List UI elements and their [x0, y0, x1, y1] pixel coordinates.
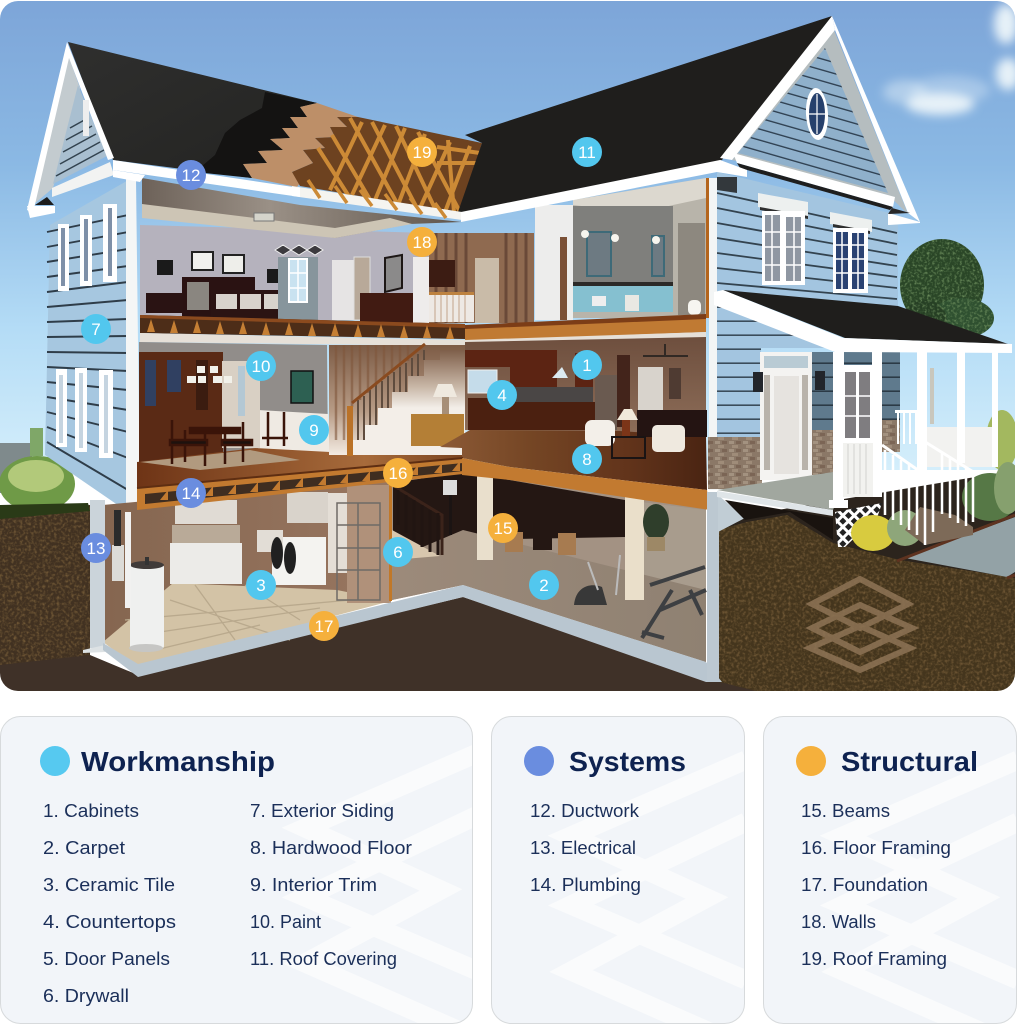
armchairs and lamp — [585, 409, 685, 458]
left eave lower section — [113, 170, 145, 182]
ceiling line main floor — [140, 332, 706, 346]
porch fascia — [714, 290, 1012, 353]
systems list — [530, 801, 641, 895]
workmanship list column one — [43, 801, 176, 1006]
marker 15 — [488, 513, 518, 543]
porch dark underside — [725, 500, 833, 540]
bedroom ceiling — [142, 178, 462, 238]
tree behind porch — [900, 239, 994, 424]
systems swatch — [524, 746, 554, 776]
lounge chairs — [505, 532, 576, 555]
left pier — [83, 500, 105, 653]
workmanship list column two: 11. Roof Covering — [250, 949, 397, 969]
front door — [760, 352, 812, 480]
structural list: 18. Walls — [801, 912, 876, 932]
stair handrail — [352, 344, 425, 403]
floor lamp — [443, 480, 457, 535]
marker 6: 6 — [393, 543, 403, 562]
structural list: 19. Roof Framing — [801, 949, 947, 969]
marker 19 — [407, 137, 437, 167]
marker 3: 3 — [256, 576, 266, 595]
upstairs white wall — [535, 205, 573, 320]
dining curtain and window — [222, 361, 260, 448]
left soil — [0, 505, 90, 668]
systems list: 14. Plumbing — [530, 875, 641, 895]
marker 17 — [309, 611, 339, 641]
marker 18: 18 — [413, 233, 431, 252]
round attic window — [805, 87, 829, 141]
panel: structural — [764, 716, 1017, 1024]
kitchen and living floor — [440, 430, 707, 490]
porch wall siding left — [717, 348, 761, 438]
porch roof — [723, 290, 1008, 344]
wall trim between interior and right wing — [706, 178, 717, 490]
stair balusters — [358, 350, 424, 440]
crown molding — [142, 204, 412, 238]
left gable soffit — [33, 52, 80, 205]
vertical pipe — [125, 512, 131, 608]
main right wall siding — [717, 172, 898, 308]
workmanship list column one: 3. Ceramic Tile — [43, 875, 175, 895]
porch columns — [829, 352, 998, 508]
bed — [187, 282, 278, 319]
marker 14 — [176, 478, 206, 508]
left wing siding lines — [47, 215, 128, 490]
structural list: 16. Floor Framing — [801, 838, 951, 858]
right eave — [461, 160, 745, 222]
kitchen — [465, 337, 706, 440]
dining table and chairs — [170, 412, 288, 466]
wire shelving — [337, 503, 380, 600]
exercise bike — [574, 555, 620, 605]
right foundation wall — [707, 492, 745, 680]
brick band — [708, 420, 900, 489]
marker 6 — [383, 537, 413, 567]
chandelier — [187, 366, 232, 383]
marker 7 — [81, 314, 111, 344]
workmanship list column one: 2. Carpet — [43, 838, 125, 858]
marker 8: 8 — [582, 450, 592, 469]
white pier at landing — [413, 257, 429, 324]
right gable soffit — [732, 30, 908, 214]
ceiling light — [254, 213, 274, 221]
tile floor — [103, 583, 391, 668]
workmanship list column two: 7. Exterior Siding — [250, 801, 394, 821]
left wing siding — [45, 182, 126, 504]
marker 16: 16 — [389, 464, 407, 483]
marker 2: 2 — [539, 576, 549, 595]
roof sheathing — [243, 103, 358, 187]
systems heading: Systems — [569, 746, 686, 777]
clouds — [883, 4, 1017, 115]
structural list — [801, 801, 951, 969]
stairwell wall — [329, 345, 465, 455]
rec room wall — [392, 470, 706, 662]
base cabinets and counter — [170, 492, 328, 584]
bottom earth — [0, 597, 760, 692]
beam column two — [625, 497, 644, 600]
gable vent — [83, 100, 89, 136]
rec room dark back wall — [393, 472, 625, 560]
wall painting — [291, 371, 313, 403]
air conditioner and shrub — [0, 428, 75, 512]
marker 7: 7 — [91, 320, 101, 339]
house cutaway illustration — [0, 0, 1017, 692]
workmanship list column one: 4. Countertops — [43, 912, 176, 932]
right roof shingles — [458, 16, 832, 212]
basement stair — [392, 486, 442, 560]
marker 13: 13 — [87, 539, 105, 558]
workmanship heading: Workmanship — [81, 746, 275, 777]
marker 1 — [572, 350, 602, 380]
structural heading: Structural — [841, 746, 978, 777]
rec room right light wall — [625, 500, 706, 600]
rafter tails — [308, 180, 446, 218]
drywall edge — [389, 483, 392, 601]
range hood — [552, 367, 568, 378]
workmanship list column one: 6. Drywall — [43, 986, 129, 1006]
marker 14: 14 — [182, 484, 200, 503]
rec room floor — [392, 530, 706, 662]
beam column one — [477, 475, 493, 560]
left upper windows — [58, 204, 117, 291]
marker 11 — [572, 137, 602, 167]
marker 4 — [487, 380, 517, 410]
left roof shingles — [68, 42, 317, 178]
kitchen cabinets — [465, 350, 630, 430]
workmanship list column one: 5. Door Panels — [43, 949, 170, 969]
porch window — [842, 365, 873, 445]
tile lines — [125, 585, 385, 650]
grass strip — [0, 503, 90, 519]
right gable siding — [738, 48, 888, 193]
porch wall siding right — [812, 352, 900, 430]
marker 12: 12 — [182, 166, 200, 185]
stair railings — [882, 440, 975, 545]
main floor beam right — [462, 458, 710, 510]
left gable siding — [53, 85, 107, 184]
marker 4: 4 — [497, 386, 507, 405]
left eave — [113, 160, 300, 197]
marker 9 — [299, 415, 329, 445]
right soil — [718, 515, 1017, 692]
bedroom window — [278, 257, 318, 320]
rafter ends and soffit — [292, 186, 462, 220]
marker 19: 19 — [413, 143, 431, 162]
corner trim — [126, 178, 140, 510]
left lower windows — [56, 368, 113, 458]
panel: workmanship — [0, 716, 480, 1024]
sky — [0, 0, 1017, 470]
marker 13 — [81, 533, 111, 563]
structural swatch — [796, 746, 826, 776]
structural list: 15. Beams — [801, 801, 890, 821]
front porch railing — [843, 443, 873, 497]
side table with lamp — [411, 384, 464, 446]
workmanship list column two: 8. Hardwood Floor — [250, 838, 412, 858]
kitchen door and picture — [638, 367, 681, 413]
systems list: 13. Electrical — [530, 838, 636, 858]
dumbbell rack — [642, 567, 706, 638]
stair wall stripes — [336, 345, 408, 440]
roof truss framing — [292, 117, 482, 215]
left fascia band — [52, 162, 114, 197]
right shrubs — [962, 410, 1017, 521]
dark shingle underlayment — [195, 92, 317, 178]
marker 9: 9 — [309, 421, 319, 440]
lattice — [835, 503, 882, 547]
systems list: 12. Ductwork — [530, 801, 640, 821]
marker 1: 1 — [582, 356, 592, 375]
bedroom door — [332, 257, 370, 320]
main floor joists — [137, 458, 463, 510]
left gable siding lines — [56, 118, 104, 176]
dining room wall — [139, 342, 328, 470]
porch deck — [717, 472, 835, 510]
walkway — [897, 515, 1015, 578]
bathroom door — [560, 237, 567, 320]
window two — [830, 212, 872, 293]
foundation wall — [103, 585, 722, 682]
marker 18 — [407, 227, 437, 257]
stairs — [905, 507, 973, 545]
workmanship list column two: 10. Paint — [250, 912, 321, 932]
workmanship swatch — [40, 746, 70, 776]
ceiling fan — [643, 344, 688, 356]
porch lanterns — [753, 371, 825, 392]
bedroom wall — [140, 225, 430, 320]
drywall column — [347, 485, 391, 603]
dining wainscot — [258, 410, 330, 452]
marker 10 — [246, 351, 276, 381]
marker 16 — [383, 458, 413, 488]
marker 3 — [246, 570, 276, 600]
rug — [140, 450, 300, 470]
water heater — [129, 557, 164, 652]
bedroom furniture and art — [146, 245, 323, 313]
door in laundry — [328, 493, 348, 573]
marker 10: 10 — [252, 357, 270, 376]
right wall siding lines — [717, 193, 897, 299]
plant — [643, 504, 669, 551]
sofa — [637, 410, 707, 437]
left gable rakes and return — [27, 42, 114, 218]
upper hallway — [429, 233, 534, 323]
underground logo in soil — [810, 579, 912, 670]
marker 15: 15 — [494, 519, 512, 538]
porch beam edge — [717, 491, 833, 516]
marker 12 — [176, 160, 206, 190]
marker 11: 11 — [578, 143, 596, 162]
electrical panel — [112, 510, 124, 581]
yellow shrub — [851, 510, 923, 551]
workmanship list column two — [250, 801, 412, 969]
upper floor joists left — [140, 315, 465, 339]
marker 2 — [529, 570, 559, 600]
bathroom — [573, 178, 706, 318]
dresser and mirror — [360, 255, 413, 323]
upper floor joist right — [465, 314, 706, 341]
porch triangle siding — [717, 303, 832, 348]
structural list: 17. Foundation — [801, 875, 928, 895]
stepped stair and white wall — [352, 350, 465, 455]
marker 17: 17 — [315, 617, 333, 636]
right gable rakes and fascia — [717, 16, 920, 225]
marker 8 — [572, 444, 602, 474]
dining floor — [137, 448, 462, 488]
right garden mulch — [718, 470, 1017, 580]
workmanship list column two: 9. Interior Trim — [250, 875, 377, 895]
rear porch railing — [895, 410, 993, 467]
bed headboard — [182, 277, 255, 319]
newel post — [347, 406, 353, 456]
workmanship list column one: 1. Cabinets — [43, 801, 139, 821]
basement laundry wall — [103, 478, 391, 662]
window one — [758, 193, 808, 285]
panel: systems — [492, 716, 746, 1024]
dining hutch — [139, 352, 223, 464]
washer and dryer — [257, 530, 326, 585]
